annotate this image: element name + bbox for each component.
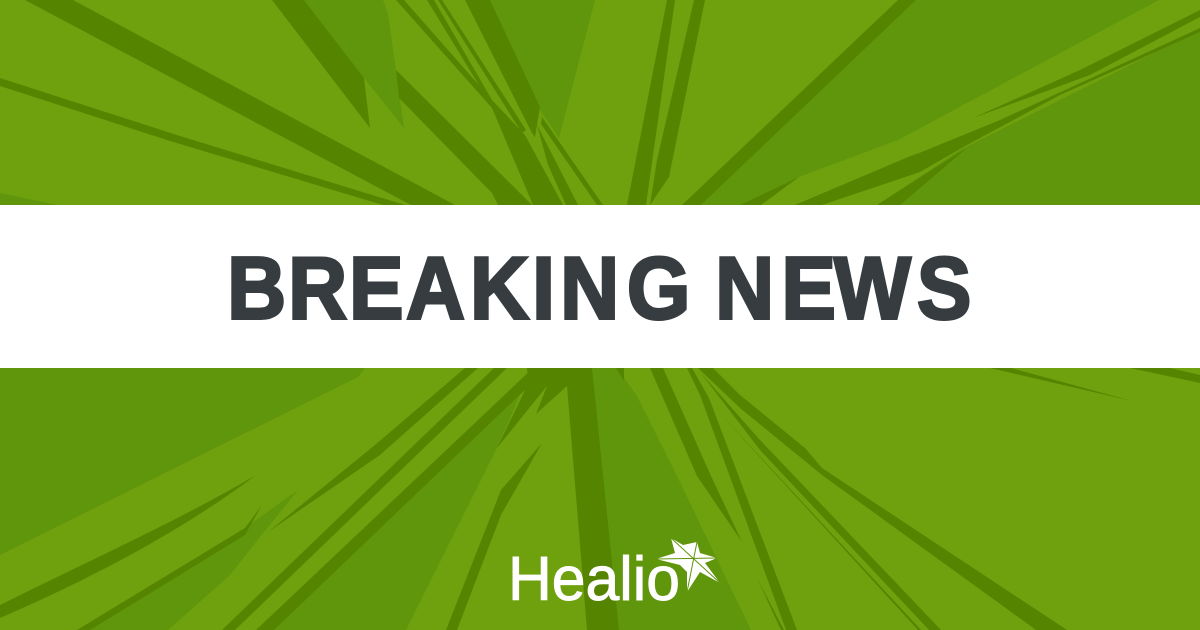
headline: BREAKING NEWS — [227, 240, 971, 338]
logo: Healio — [508, 538, 720, 614]
white banner band — [0, 205, 1200, 368]
logo star — [656, 538, 720, 592]
logo wordmark: Healio — [508, 545, 680, 614]
